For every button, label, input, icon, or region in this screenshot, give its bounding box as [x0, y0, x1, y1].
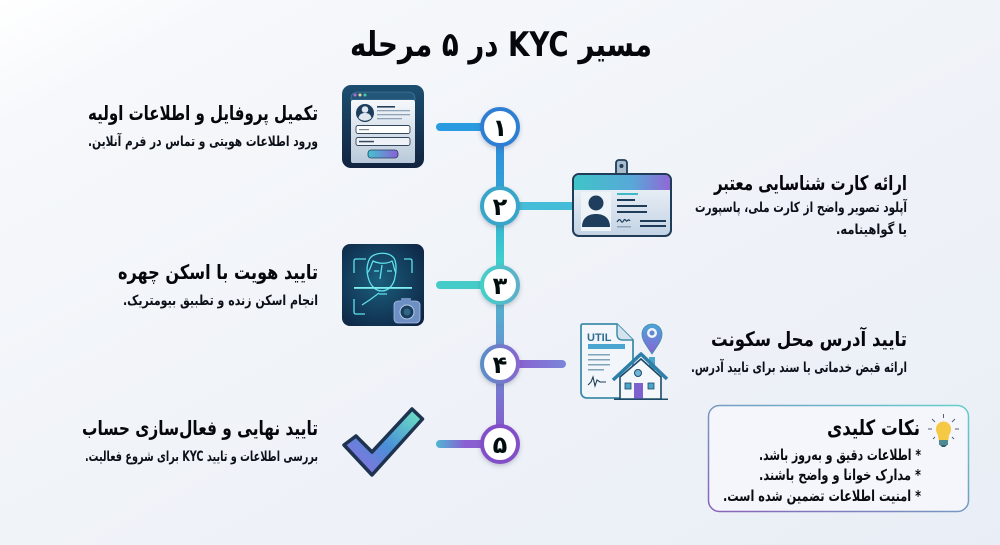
step 3 marker: ۳: [493, 272, 508, 300]
title: مسیر KYC در ۵ مرحله: [350, 25, 652, 65]
icon: profile form: [342, 85, 424, 168]
step 1 text: تکمیل پروفایل و اطلاعات اولیه: [88, 101, 318, 126]
connector 1: [436, 123, 486, 131]
step 3 text: انجام اسکن زنده و تطبیق بیومتریک.: [123, 293, 318, 309]
step 1 marker: ۱: [493, 114, 507, 142]
step 1 text: [88, 101, 318, 150]
step 2 text: ارائه کارت شناسایی معتبر: [713, 171, 907, 195]
icon: ID card: [573, 160, 671, 236]
key point 3: * امنیت اطلاعات تضمین شده است.: [723, 487, 921, 505]
step 4 text: تایید آدرس محل سکونت: [711, 326, 907, 351]
connector 4: [514, 360, 566, 368]
step 3 marker: [482, 267, 518, 303]
step 3 text: تایید هویت با اسکن چهره: [118, 260, 318, 285]
connector 5: [436, 440, 486, 448]
icon: utility bill and house: [581, 324, 668, 400]
key point 2: * مدارک خوانا و واضح باشند.: [759, 466, 921, 484]
step 2 marker: [482, 188, 518, 224]
step 4 marker: ۴: [493, 351, 507, 379]
step 5 text: بررسی اطلاعات و تایید KYC برای شروع فعالیت.: [85, 449, 318, 465]
step 2 text: یا گواهینامه.: [836, 221, 907, 238]
timeline: [436, 109, 574, 462]
step 5 text: [82, 416, 318, 465]
step 2 marker: ۲: [493, 193, 508, 221]
icon: face scan: [342, 244, 424, 326]
step 3 text: [118, 260, 318, 309]
icon: light bulb: [928, 414, 959, 447]
key point 1: * اطلاعات دقیق و به‌روز باشد.: [759, 446, 921, 464]
step 1 text: ورود اطلاعات هویتی و تماس در فرم آنلاین.: [88, 132, 318, 150]
step 4 text: ارائه قبض خدماتی یا سند برای تایید آدرس.: [691, 358, 907, 376]
key points heading: نکات کلیدی: [827, 416, 920, 440]
icon: check mark: [344, 409, 422, 475]
step 2 text: آپلود تصویر واضح از کارت ملی، پاسپورت: [695, 198, 908, 216]
connector 3: [436, 281, 486, 289]
step 4 text: [691, 326, 907, 376]
step 1 marker: [482, 109, 518, 145]
timeline spine: [496, 127, 504, 444]
step 5 marker: [482, 426, 518, 462]
step 5 marker: ۵: [493, 431, 507, 459]
panel: key points: [708, 406, 968, 512]
step 2 text: [695, 171, 908, 238]
connector 2: [514, 202, 574, 210]
step 4 marker: [482, 346, 518, 382]
step 5 text: تایید نهایی و فعال‌سازی حساب: [82, 416, 318, 440]
icon: utility bill and house: UTIL: [587, 332, 612, 344]
